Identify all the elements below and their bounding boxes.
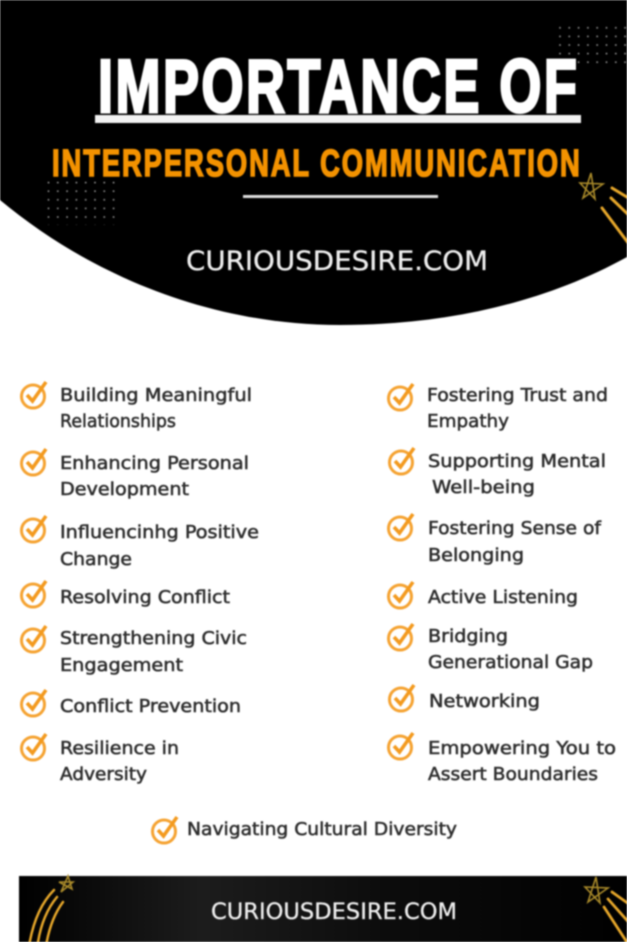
item: enhancing personal development: Enhancing Personal: [60, 453, 249, 474]
item: enhancing personal development: Development: [60, 479, 189, 500]
left checklist: [22, 382, 259, 785]
item: fostering sense of belonging: Belonging: [428, 545, 524, 566]
item: resilience in adversity: Resilience in: [60, 738, 179, 759]
item: active listening: Active Listening: [428, 587, 578, 608]
dot grid: top right: [552, 21, 627, 67]
item: strengthening civic engagement: [22, 626, 247, 676]
item: resolving conflict: [22, 581, 230, 608]
item: building meaningful relationships: Building Meaningful: [60, 385, 252, 406]
item: strengthening civic engagement: Engagement: [60, 655, 183, 676]
item: strengthening civic engagement: Strengthening Civic: [60, 628, 247, 649]
item: empowering you to assert boundaries: Empowering You to: [428, 738, 616, 759]
item: bridging generational gap: [388, 624, 593, 673]
item: building meaningful relationships: [22, 382, 252, 432]
item: resilience in adversity: Adversity: [60, 764, 147, 785]
item: influencing positive change: Influencinhg Positive: [60, 522, 259, 543]
item: navigating cultural diversity: [152, 817, 457, 843]
item: fostering trust and empathy: Fostering Trust and: [427, 385, 608, 406]
item: empowering you to assert boundaries: [388, 733, 616, 785]
item: fostering trust and empathy: [388, 384, 608, 432]
item: conflict prevention: [22, 690, 241, 717]
item: networking: Networking: [429, 691, 540, 712]
footer panel: [19, 876, 627, 942]
item: building meaningful relationships: Relationships: [60, 411, 176, 432]
item: bridging generational gap: Bridging: [428, 626, 508, 647]
item: influencing positive change: [22, 516, 259, 570]
item: fostering trust and empathy: Empathy: [427, 411, 509, 432]
dot grid: left: [44, 181, 120, 225]
website url: CURIOUSDESIRE.COM: [186, 246, 488, 277]
item: networking: [390, 685, 540, 712]
item: fostering sense of belonging: Fostering Sense of: [428, 518, 602, 539]
footer url: CURIOUSDESIRE.COM: [211, 900, 457, 925]
right checklist: [388, 384, 616, 785]
title underline: [95, 115, 581, 123]
item: enhancing personal development: [22, 449, 249, 500]
icon: right shooting star: [585, 877, 627, 942]
icon: shooting star: [580, 173, 627, 248]
item: bridging generational gap: Generational Gap: [428, 652, 593, 673]
title: importance of: IMPORTANCE OF: [98, 44, 577, 128]
subtitle: INTERPERSONAL COMMUNICATION: [52, 143, 580, 185]
short divider: [243, 195, 438, 198]
item: active listening: [388, 582, 578, 608]
item: navigating cultural diversity: Navigating Cultural Diversity: [187, 819, 457, 840]
item: fostering sense of belonging: [388, 514, 602, 566]
item: empowering you to assert boundaries: Assert Boundaries: [428, 764, 598, 785]
item: supporting mental well-being: Well-being: [432, 477, 535, 498]
item: resolving conflict: Resolving Conflict: [60, 587, 230, 608]
icon: left shooting star: [29, 876, 73, 942]
item: supporting mental well-being: [390, 448, 606, 498]
header panel: [0, 0, 627, 325]
item: influencing positive change: Change: [60, 549, 132, 570]
item: supporting mental well-being: Supporting Mental: [428, 451, 606, 472]
item: resilience in adversity: [22, 734, 179, 785]
item: conflict prevention: Conflict Prevention: [60, 696, 241, 717]
